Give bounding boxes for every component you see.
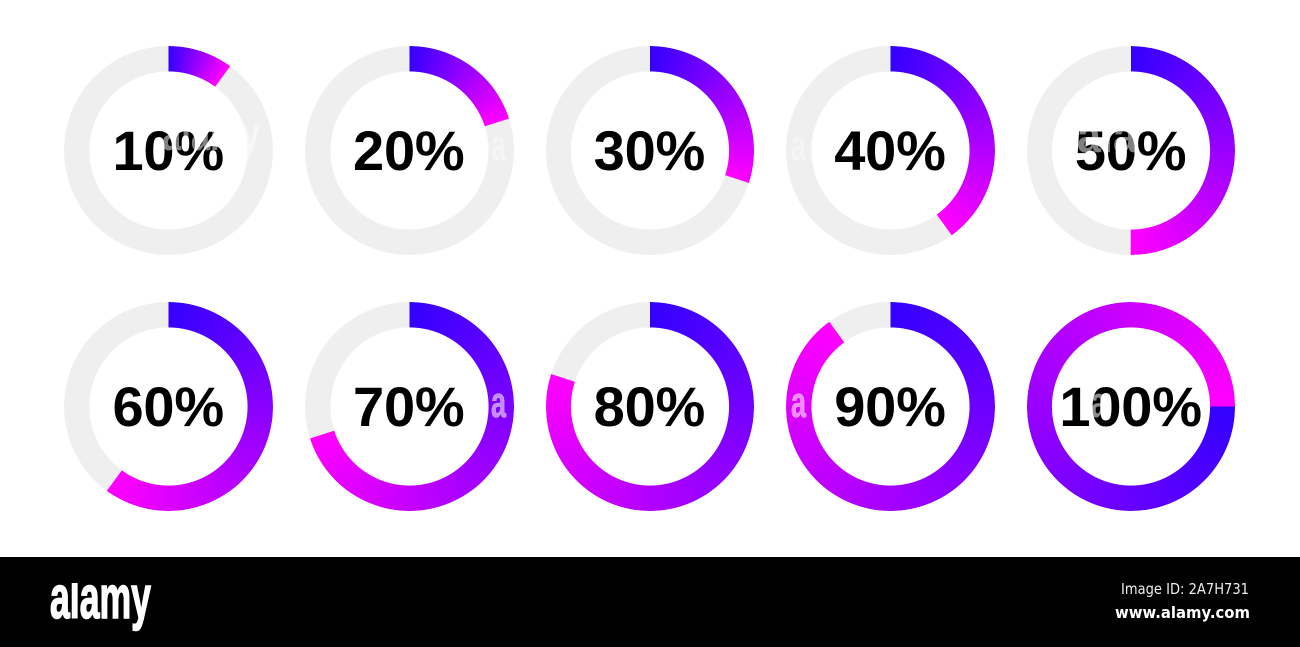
- ring: 10% arc: [64, 46, 273, 255]
- ring: 90% arc: [786, 302, 995, 511]
- label: 80%: 80%: [594, 375, 705, 438]
- ring: 50% arc: [1027, 46, 1235, 255]
- ring: 60% arc: [64, 302, 273, 511]
- panel: 50% progress ring: [1027, 46, 1235, 255]
- website text: www.alamy.com: [1115, 603, 1250, 622]
- watermark: faint letters over rings: a: [791, 121, 806, 170]
- ring: 20% arc: [305, 46, 514, 255]
- panel: 20% progress ring: [305, 46, 514, 255]
- panel: 30% progress ring: [546, 46, 754, 255]
- panel: 70% progress ring: [305, 302, 514, 511]
- label: 40%: 40%: [834, 119, 946, 182]
- panel: 60% progress ring: [64, 302, 273, 511]
- ring: 80% arc: [546, 302, 754, 511]
- watermark: faint letters over rings: a: [791, 378, 806, 427]
- label: 70%: 70%: [353, 375, 465, 438]
- label: 60%: 60%: [112, 375, 224, 438]
- panel: 80% progress ring: [546, 302, 754, 511]
- watermark: faint letters over rings: a: [491, 121, 506, 170]
- ring: 30% arc: [546, 46, 754, 255]
- ring: 40% arc: [786, 46, 995, 255]
- watermark: faint letters over rings: alamy: [162, 108, 260, 160]
- label: 30%: 30%: [594, 119, 705, 182]
- label: 20%: 20%: [353, 119, 465, 182]
- panel: 100% progress ring: [1027, 302, 1235, 511]
- label: 90%: 90%: [834, 375, 946, 438]
- panel: 40% progress ring: [786, 46, 995, 255]
- label: 50%: 50%: [1075, 119, 1186, 182]
- panel: 90% progress ring: [786, 302, 995, 511]
- label: 10%: 10%: [112, 119, 224, 182]
- ring: 100% arc: [1027, 302, 1235, 511]
- ring: 70% arc: [305, 302, 514, 511]
- watermark: faint letters over rings: a: [1091, 378, 1106, 427]
- logo: alamy: alamy: [50, 564, 151, 631]
- footer bar: [0, 557, 1300, 647]
- image id text: Image ID: 2A7H731: [1121, 580, 1249, 598]
- watermark: faint letters over rings: ala: [1077, 110, 1137, 162]
- label: 100%: 100%: [1059, 375, 1202, 438]
- panel: 10% progress ring: [64, 46, 273, 255]
- watermark: faint letters over rings: a: [491, 378, 506, 427]
